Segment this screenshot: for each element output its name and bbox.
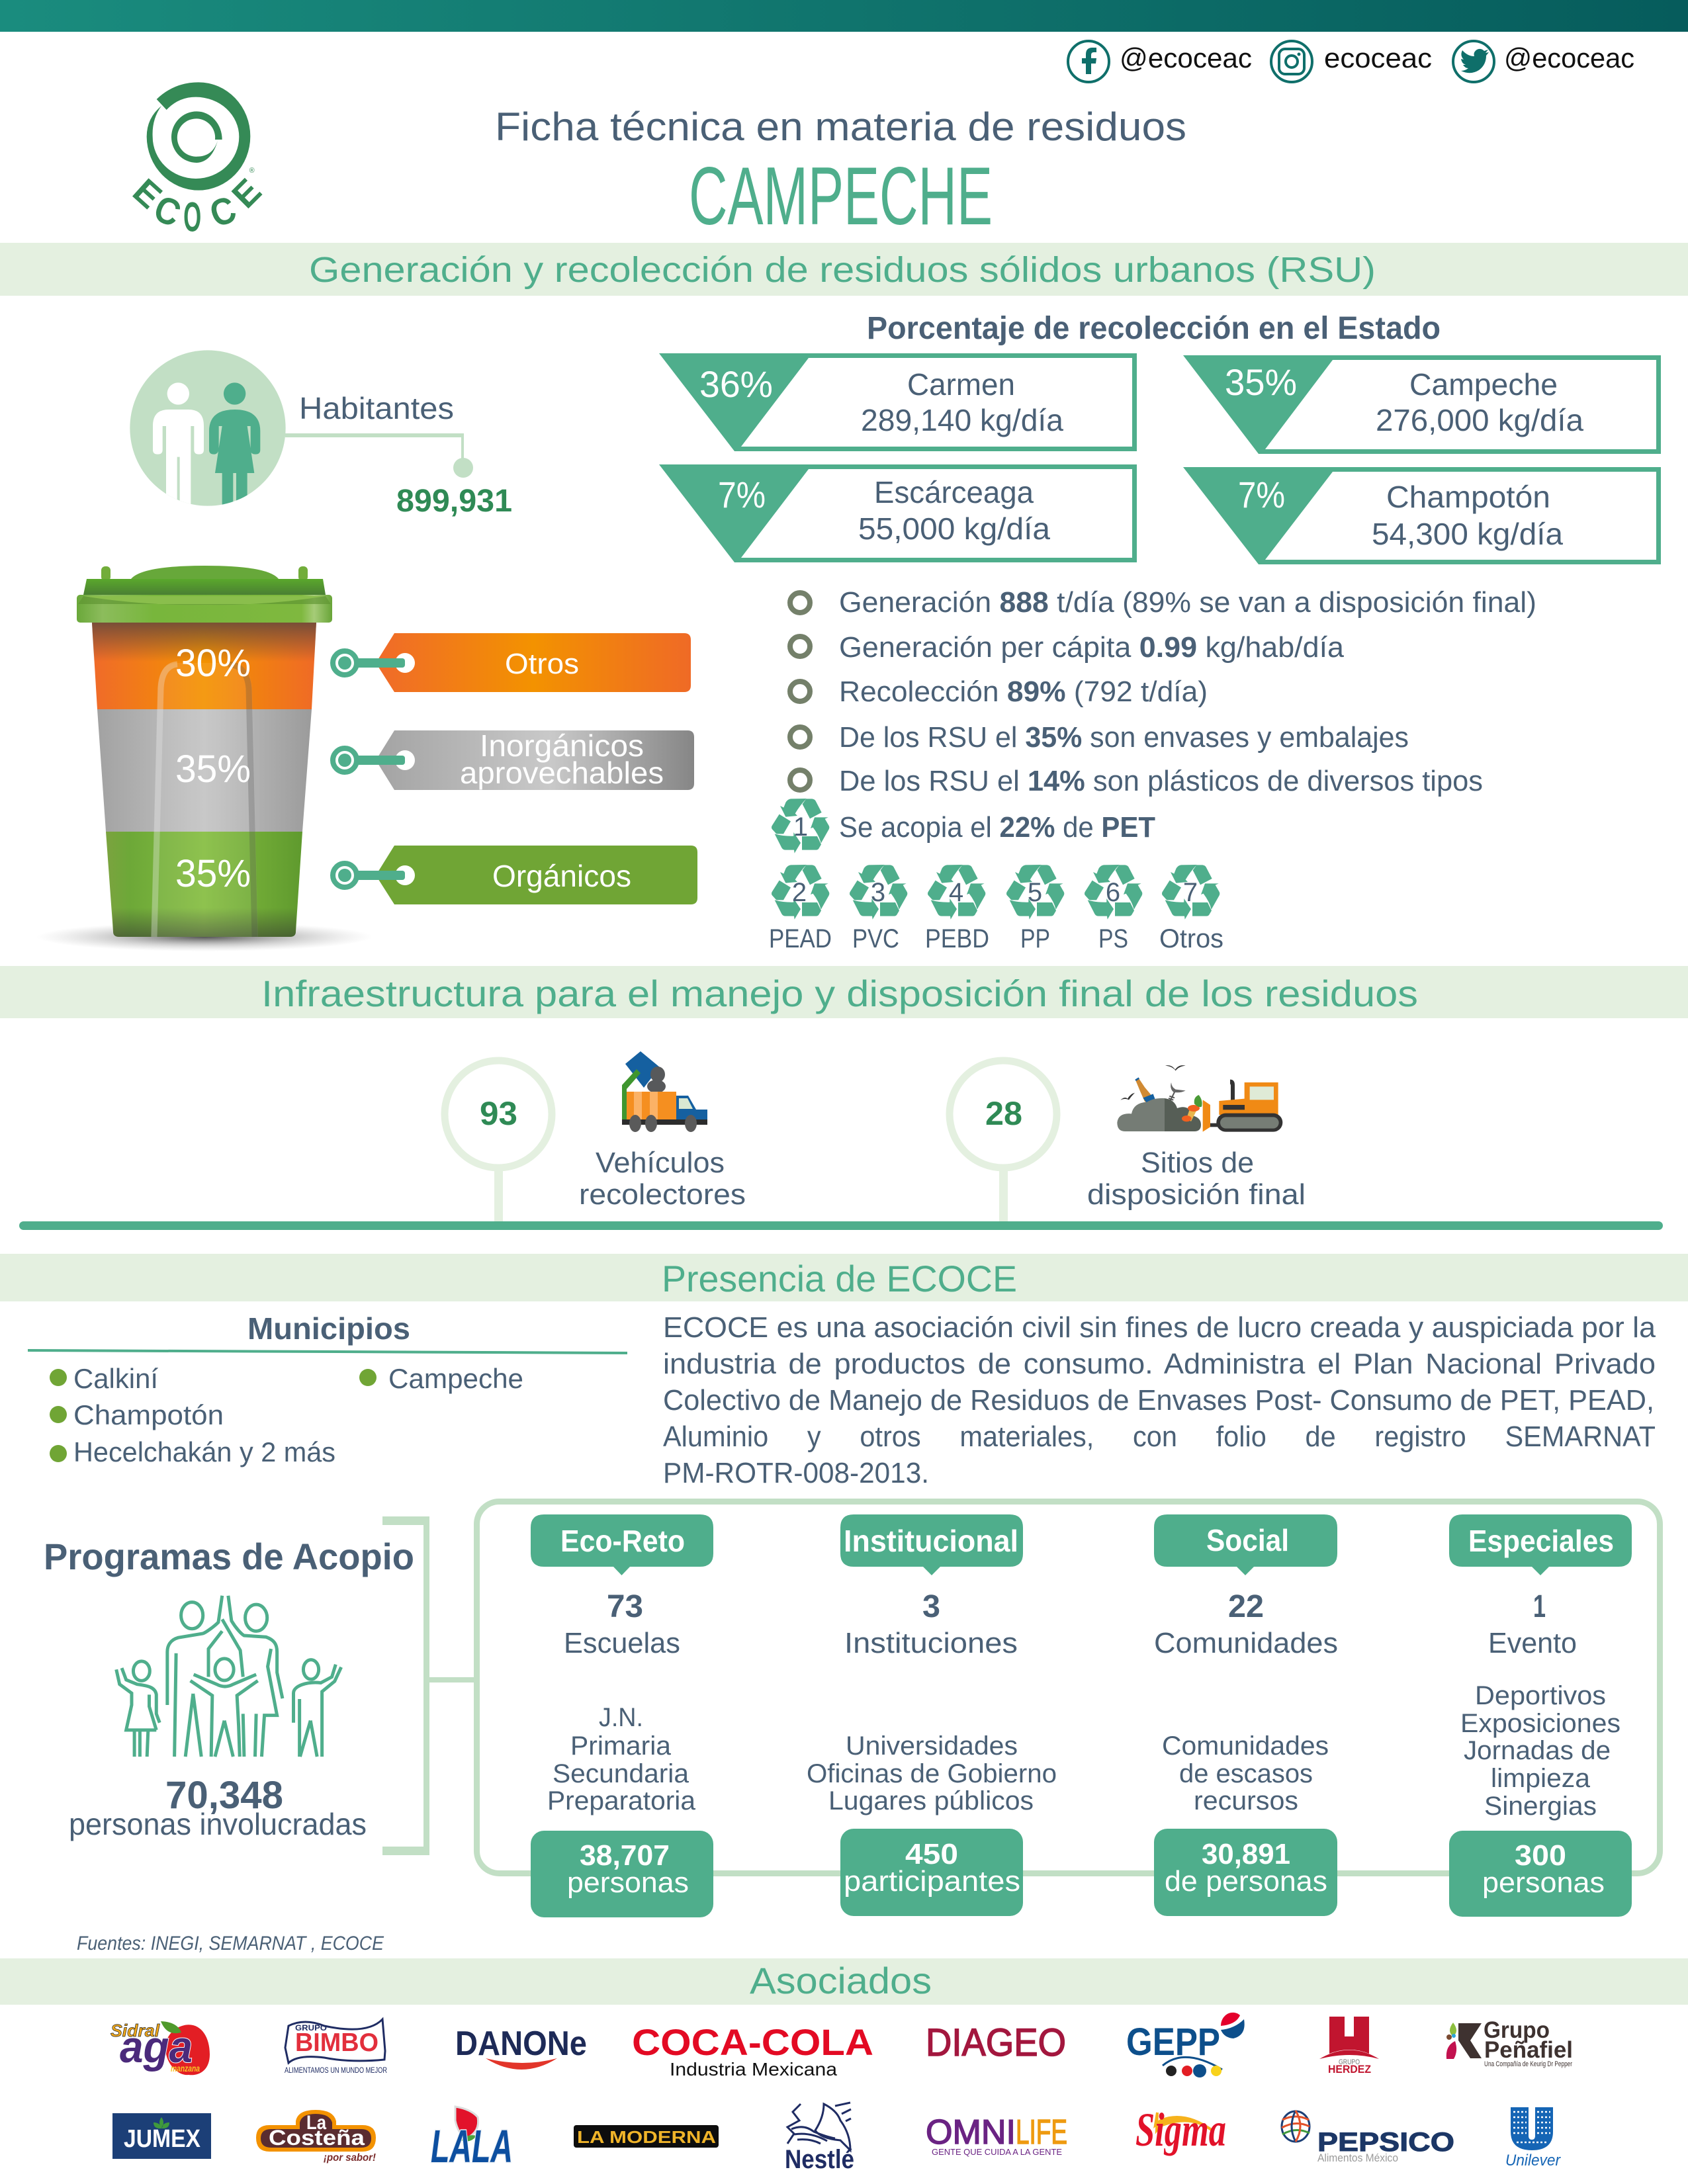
header: Especiales [1449, 1514, 1632, 1575]
logo: Omnilife: OMNI [926, 2113, 1016, 2152]
card: Champotón: 54,300 kg/día [1372, 517, 1563, 551]
logo: Nestlé: Nestlé [785, 2145, 854, 2174]
bullet 3: Recolección 89% (792 t/día) [839, 676, 1208, 708]
card: Champotón: 7% [1238, 474, 1285, 515]
logo wordmark: C [204, 188, 242, 236]
stat: vehículos: 93 [480, 1095, 517, 1132]
card: Carmen: Carmen [907, 367, 1015, 402]
result: participantes [840, 1829, 1023, 1916]
municipio: Calkiní: Calkiní [73, 1363, 158, 1394]
result: personas: personas [567, 1866, 689, 1899]
logo: Pepsico [1282, 2111, 1454, 2164]
code 2 PEAD: PEAD [769, 924, 832, 953]
program: Institucional [807, 1514, 1057, 1916]
detail: lugares [807, 1731, 1057, 1815]
logo: Omnilife [926, 2113, 1067, 2157]
detail: comunidades [1162, 1731, 1329, 1815]
logo wordmark [125, 167, 269, 240]
code 2 PEAD: 2 [792, 878, 807, 907]
detail: eventos [1460, 1681, 1621, 1821]
header: Eco-Reto [531, 1514, 713, 1575]
logo: Bimbo: BIMBO [295, 2029, 378, 2057]
section heading: presencia: Presencia de ECOCE [662, 1258, 1017, 1299]
logo: Pepsico: Alimentos México [1317, 2152, 1398, 2164]
text block: descripción ECOCE: PM-ROTR-008-2013. [663, 1457, 929, 1489]
code 7 Otros: 7 [1183, 878, 1198, 907]
municipio: Campeche: Campeche [388, 1363, 523, 1394]
population connector [285, 433, 473, 478]
stat: vehículos [445, 1051, 746, 1224]
detail: eventos: limpieza [1491, 1764, 1591, 1793]
logo wordmark: E [125, 171, 169, 216]
card: Escárceaga: 7% [718, 474, 766, 515]
bin shadow [36, 922, 373, 951]
detail: niveles: Primaria [570, 1731, 672, 1761]
card: Campeche: 35% [1225, 361, 1297, 403]
text block: descripción ECOCE: Aluminio y otros materiales, con folio de registro SEMARNAT [663, 1420, 1656, 1453]
section band: infraestructura [0, 966, 1688, 1018]
count: escuelas [564, 1589, 680, 1659]
logo: Peñafiel: Grupo [1484, 2017, 1550, 2043]
logo wordmark: E [225, 171, 269, 216]
bullet list: datos RSU [772, 586, 1536, 853]
logo: Bimbo: GRUPO [295, 2023, 327, 2032]
result: personas [1449, 1831, 1632, 1917]
bin lid [77, 566, 332, 623]
heading: recolección: Porcentaje de recolección en el Estado [867, 311, 1441, 346]
code 6 PS [1085, 865, 1142, 953]
detail: lugares: Oficinas de Gobierno [807, 1759, 1057, 1788]
logo: Jumex [112, 2113, 211, 2159]
detail: niveles: J.N. [599, 1703, 643, 1732]
code 4 PEBD [925, 865, 989, 953]
recycling codes row [769, 865, 1223, 953]
population icon [130, 350, 286, 507]
bullet 4: De los RSU el 35% son envases y embalajes [839, 721, 1409, 754]
population value: 899,931 [396, 484, 512, 519]
card: Carmen: 289,140 kg/día [861, 403, 1063, 437]
logo: Omnilife: GENTE QUE CUIDA A LA GENTE [932, 2147, 1062, 2157]
label: vehículos [579, 1147, 746, 1211]
municipio: Hecelchakán: Hecelchakán y 2 más [73, 1436, 335, 1467]
header: Social [1154, 1514, 1337, 1575]
card: Carmen: 36% [699, 363, 773, 405]
text block: descripción ECOCE: Colectivo de Manejo de Residuos de Envases Post- Consumo de PET, PEAD, [663, 1384, 1654, 1417]
logo: Omnilife: LIFE [1016, 2113, 1067, 2152]
logo: Bimbo [285, 2019, 387, 2075]
logo: La Costeña: ¡por sabor! [324, 2152, 377, 2163]
tag: Orgánicos: Orgánicos [492, 859, 631, 893]
result: participantes: participantes [844, 1865, 1020, 1898]
detail: niveles: Preparatoria [547, 1786, 696, 1815]
title: Ficha técnica en materia de residuos [495, 105, 1186, 149]
count: escuelas: Escuelas [564, 1627, 680, 1659]
label: vehículos: Vehículos [596, 1147, 725, 1179]
logo: Coca-Cola: COCA-COLA [632, 2021, 873, 2063]
logo: Bimbo: ALIMENTAMOS UN MUNDO MEJOR [285, 2066, 387, 2075]
logo: Jumex: JUMEX [124, 2125, 201, 2153]
detail: comunidades: Comunidades [1162, 1731, 1329, 1761]
panel: municipios [28, 1311, 627, 1467]
result: participantes: 450 [905, 1838, 958, 1870]
tag: Inorgánicos aprovechables [333, 728, 694, 790]
card: Escárceaga: Escárceaga [874, 475, 1034, 509]
logo: Danone: DANONe [455, 2025, 587, 2063]
logo: Gepp [1126, 2013, 1245, 2077]
logo: La Costeña: La [306, 2112, 326, 2134]
icon: instagram [1271, 41, 1312, 82]
programs frame [476, 1502, 1660, 1874]
detail: lugares: Lugares públicos [828, 1786, 1034, 1815]
header: Eco-Reto: Eco-Reto [560, 1524, 685, 1558]
result: personas: 300 [1515, 1839, 1566, 1872]
card: Champotón [1183, 467, 1661, 564]
code 4 PEBD: PEBD [925, 924, 989, 953]
icon: twitter [1453, 41, 1494, 82]
bin segment: otros [92, 623, 316, 709]
count: instituciones: Instituciones [844, 1627, 1018, 1659]
count: comunidades [1154, 1589, 1338, 1659]
logo: Unilever [1505, 2107, 1561, 2169]
sources note: Fuentes: INEGI, SEMARNAT , ECOCE [77, 1933, 384, 1954]
text block: descripción ECOCE: industria de productos de consumo. Administra el Plan Nacional Privado [663, 1348, 1656, 1380]
card: Campeche [1183, 355, 1661, 454]
logo: Sidral Aga: Sidral [111, 2021, 160, 2040]
count: instituciones [844, 1589, 1018, 1659]
section heading: infraestructura: Infraestructura para el manejo y disposición final de los residuos [261, 973, 1418, 1014]
bullet 5: De los RSU el 14% son plásticos de diversos tipos [839, 765, 1483, 797]
bin segment: inorgánicos [97, 709, 312, 832]
timeline bar [19, 1221, 1663, 1230]
logo: La Costeña: Costeña [269, 2126, 365, 2150]
logo: Herdez: GRUPO [1339, 2058, 1360, 2066]
percent: inorgánicos: 35% [175, 748, 251, 791]
result: personas: personas [1482, 1866, 1605, 1899]
instagram handle: ecoceac [1324, 42, 1432, 73]
header: Institucional [840, 1514, 1023, 1575]
percent: otros: 30% [175, 642, 251, 685]
count: comunidades: Comunidades [1154, 1627, 1338, 1659]
detail: eventos: Deportivos [1475, 1681, 1606, 1710]
stat: sitios de disposición: 28 [985, 1095, 1022, 1132]
card: Escárceaga: 55,000 kg/día [858, 511, 1050, 546]
percent: orgánicos: 35% [175, 852, 251, 895]
heading: municipios: Municipios [247, 1311, 410, 1346]
code 3 PVC: 3 [871, 878, 885, 907]
logo: Coca-Cola [632, 2021, 873, 2079]
card: Carmen [659, 353, 1137, 451]
label: vehículos: recolectores [579, 1178, 746, 1211]
bin segment: orgánicos [106, 832, 302, 937]
card: Campeche: 276,000 kg/día [1376, 403, 1583, 437]
logo: Herdez: HERDEZ [1328, 2063, 1371, 2075]
municipio: Champotón: Champotón [73, 1399, 224, 1430]
result: de personas: de personas [1165, 1865, 1327, 1898]
section band: presencia [0, 1254, 1688, 1301]
card: Champotón: Champotón [1386, 480, 1550, 514]
icon: facebook [1068, 41, 1109, 82]
code 6 PS: 6 [1106, 878, 1120, 907]
logo: Sidral Aga: manzana [171, 2063, 200, 2074]
result: personas: 38,707 [580, 1839, 670, 1872]
woman [209, 382, 260, 507]
tag: Otros [333, 633, 691, 692]
code 7 Otros: Otros [1159, 924, 1223, 953]
ECOCE logo [125, 82, 269, 240]
card: Escárceaga [659, 464, 1137, 562]
count: evento: Evento [1488, 1627, 1577, 1659]
icon: bulldozer landfill [1117, 1065, 1282, 1132]
bullet 1: Generación 888 t/día (89% se van a disposición final) [839, 586, 1536, 619]
personas label: personas involucradas [69, 1807, 367, 1841]
detail: lugares: Universidades [846, 1731, 1018, 1761]
bullet 6: PET: 1 [793, 812, 808, 842]
detail: niveles: Secundaria [553, 1759, 689, 1788]
header: Social: Social [1206, 1523, 1289, 1557]
bin handle recess [151, 663, 258, 937]
logo: Peñafiel: Una Compañía de Keurig Dr Pepper [1484, 2060, 1572, 2068]
tag: Inorgánicos aprovechables: aprovechables [460, 756, 664, 790]
code 5 PP [1006, 865, 1064, 953]
code 7 Otros [1159, 865, 1223, 953]
section heading: asociados: Asociados [750, 1960, 932, 2001]
logo: La Costeña [256, 2110, 377, 2163]
detail: eventos: Jornadas de [1464, 1736, 1611, 1765]
section band: asociados [0, 1958, 1688, 2005]
detail: eventos: Sinergias [1484, 1792, 1597, 1821]
total personas: 70,348 [165, 1774, 283, 1817]
panel: programas de acopio summary [44, 1536, 414, 1841]
waste bin chart [36, 566, 373, 951]
twitter handle: @ecoceac [1504, 42, 1634, 73]
logo: Peñafiel: Peñafiel [1484, 2037, 1573, 2063]
man [153, 382, 204, 507]
code 5 PP: PP [1020, 924, 1050, 953]
detail: eventos: Exposiciones [1460, 1709, 1621, 1738]
logo: Unilever: Unilever [1505, 2152, 1561, 2169]
heading: programas: Programas de Acopio [44, 1536, 414, 1577]
header: Especiales: Especiales [1468, 1524, 1614, 1558]
header: Institucional: Institucional [844, 1524, 1018, 1558]
program: Social [1154, 1514, 1338, 1916]
logo: Nestlé [785, 2103, 854, 2174]
label: sitios: Sitios de [1141, 1147, 1254, 1179]
logo wordmark: O [183, 193, 201, 240]
state name: CAMPECHE [689, 151, 993, 242]
logo: Pepsico: PEPSICO [1317, 2128, 1454, 2157]
logo wordmark: C [148, 187, 187, 235]
bracket connector [382, 1516, 476, 1855]
detail: comunidades: recursos [1194, 1786, 1298, 1815]
logo: Peñafiel [1446, 2017, 1573, 2068]
logo wordmark: ® [249, 167, 255, 175]
text block: descripción ECOCE [663, 1311, 1656, 1489]
tag: Inorgánicos aprovechables: Inorgánicos [480, 728, 644, 763]
count: instituciones: 3 [922, 1589, 940, 1624]
section heading: RSU: Generación y recolección de residuos sólidos urbanos (RSU) [309, 250, 1376, 290]
top bar [0, 0, 1688, 32]
label: sitios [1087, 1147, 1306, 1211]
card: Campeche: Campeche [1409, 367, 1558, 402]
logo: Sigma: Sigma [1135, 2103, 1226, 2156]
social media row [1068, 41, 1634, 82]
result: personas [531, 1831, 713, 1917]
code 6 PS: PS [1098, 924, 1128, 953]
population label: Habitantes [299, 391, 454, 425]
code 3 PVC: PVC [852, 924, 899, 953]
count: comunidades: 22 [1228, 1589, 1264, 1624]
program: Especiales [1449, 1514, 1632, 1917]
count: escuelas: 73 [607, 1589, 643, 1624]
program: Eco-Reto [531, 1514, 713, 1917]
bullet 2: Generación per cápita 0.99 kg/hab/día [839, 631, 1345, 664]
logo: Diageo: DIAGEO [926, 2021, 1066, 2064]
count: evento: 1 [1533, 1589, 1546, 1624]
logo: Herdez [1319, 2017, 1379, 2075]
logo: La Moderna: LA MODERNA [577, 2127, 716, 2147]
logo: Lala: LALA [431, 2120, 513, 2172]
code 2 PEAD [769, 865, 832, 953]
code 3 PVC [850, 865, 907, 953]
count: evento [1488, 1589, 1577, 1659]
result: de personas: 30,891 [1202, 1838, 1290, 1870]
tag: Otros: Otros [505, 648, 579, 680]
bullet 6: PET [772, 799, 1155, 853]
stat: sitios de disposición [950, 1061, 1306, 1224]
section band: RSU [0, 243, 1688, 296]
detail: comunidades: de escasos [1179, 1759, 1313, 1788]
icon: garbage truck [622, 1051, 707, 1132]
result: de personas [1154, 1829, 1337, 1916]
logo: Lala [431, 2107, 513, 2172]
code 5 PP: 5 [1028, 878, 1042, 907]
label: sitios: disposición final [1087, 1178, 1306, 1211]
code 4 PEBD: 4 [949, 878, 963, 907]
bullet 6: PET: Se acopia el 22% de PET [839, 811, 1155, 844]
icon: family [116, 1596, 341, 1757]
text block: descripción ECOCE: ECOCE es una asociación civil sin fines de lucro creada y auspiciada por la [663, 1311, 1656, 1344]
logo: Coca-Cola: Industria Mexicana [670, 2059, 837, 2079]
detail: niveles [547, 1703, 696, 1815]
logo: Gepp: GEPP [1126, 2021, 1220, 2064]
facebook handle: @ecoceac [1120, 42, 1252, 73]
logo: Sidral Aga: aga [120, 2022, 193, 2072]
tag: Orgánicos [333, 846, 697, 904]
